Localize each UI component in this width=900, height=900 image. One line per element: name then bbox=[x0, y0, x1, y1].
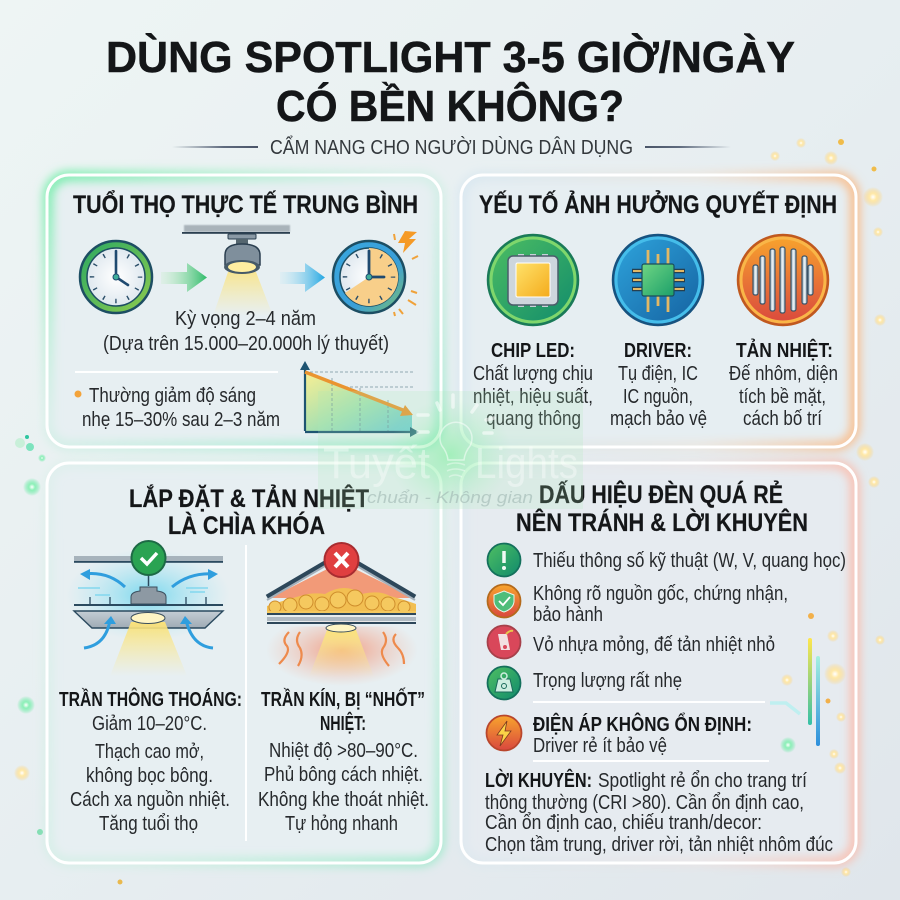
icon: missing specs bbox=[488, 544, 520, 576]
text: ventilated ceiling: TRẦN THÔNG THOÁNG: bbox=[59, 687, 242, 711]
warning 2 bbox=[533, 583, 788, 626]
panel: warning signs and advice bbox=[461, 463, 856, 863]
title: CÓ BỀN KHÔNG? bbox=[276, 80, 624, 131]
text: driver: DRIVER: bbox=[624, 339, 692, 362]
text: heat sink: tích bề mặt, bbox=[739, 386, 826, 408]
watermark: Tuyết Lights: Lights bbox=[475, 439, 578, 488]
text: advice bbox=[485, 768, 833, 856]
divider bbox=[533, 760, 769, 762]
divider bbox=[533, 701, 765, 703]
arrow: green bbox=[161, 263, 207, 292]
icon: thin plastic bbox=[488, 626, 520, 658]
heading bbox=[516, 479, 808, 537]
text: sealed ceiling: Không khe thoát nhiệt. bbox=[258, 789, 429, 811]
subtitle: CẨM NANG CHO NGƯỜI DÙNG DÂN DỤNG bbox=[270, 136, 633, 159]
text: advice: Cần ổn định cao, chiếu tranh/decor: bbox=[485, 812, 762, 834]
text: chip LED: nhiệt, hiệu suất, bbox=[473, 386, 593, 408]
icon: voltage bolt bbox=[486, 716, 522, 750]
text: brightness loss: Thường giảm độ sáng bbox=[89, 385, 256, 407]
icon: LED chip bbox=[488, 235, 578, 325]
panel: average lifespan bbox=[47, 175, 441, 447]
watermark: Tuyết Lights: Tuyết bbox=[323, 439, 430, 488]
text: ventilated ceiling: không bọc bông. bbox=[86, 765, 213, 787]
icon: weight bbox=[488, 666, 520, 700]
icon: depleted clock with spark bbox=[333, 231, 418, 316]
arrow: blue bbox=[280, 263, 325, 292]
heading: LÀ CHÌA KHÓA bbox=[168, 510, 325, 540]
divider bbox=[245, 545, 247, 841]
icon: spotlight bbox=[182, 225, 290, 316]
text: sealed ceiling: TRẦN KÍN, BỊ “NHỐT” bbox=[261, 687, 425, 711]
text: expectation bbox=[103, 308, 389, 355]
text: sealed ceiling: NHIỆT: bbox=[320, 711, 366, 735]
text: ventilated ceiling: Cách xa nguồn nhiệt. bbox=[70, 789, 230, 811]
title bbox=[106, 32, 795, 131]
icon: shield bbox=[488, 584, 520, 618]
text: brightness loss bbox=[74, 385, 280, 431]
text: brightness loss: nhẹ 15–30% sau 2–3 năm bbox=[82, 409, 280, 431]
text: chip LED bbox=[473, 339, 593, 430]
text: driver: Tụ điện, IC bbox=[618, 363, 698, 385]
warning 5: Driver rẻ ít bảo vệ bbox=[533, 735, 667, 757]
text: expectation: Kỳ vọng 2–4 năm bbox=[175, 308, 316, 330]
text: driver: IC nguồn, bbox=[623, 386, 693, 408]
heading: TUỔI THỌ THỰC TẾ TRUNG BÌNH bbox=[73, 189, 418, 219]
warning 2: bảo hành bbox=[533, 604, 603, 626]
icon: heat sink bbox=[738, 235, 828, 325]
text: ventilated ceiling bbox=[59, 687, 242, 835]
panel: decisive factors bbox=[461, 175, 856, 447]
icon: driver IC bbox=[613, 235, 703, 325]
warning 2: Không rõ nguồn gốc, chứng nhận, bbox=[533, 583, 788, 605]
line chart bbox=[300, 361, 419, 437]
panel: installation and cooling bbox=[47, 463, 441, 863]
text: heat sink: Đế nhôm, diện bbox=[729, 363, 838, 385]
text: advice: Chọn tầm trung, driver rời, tản nhiệt nhôm đúc bbox=[485, 834, 833, 856]
heading: NÊN TRÁNH & LỜI KHUYÊN bbox=[516, 507, 808, 537]
warning 5 bbox=[533, 712, 752, 757]
text: sealed ceiling bbox=[258, 687, 429, 835]
illustration: ventilated ceiling bbox=[66, 541, 230, 676]
text: ventilated ceiling: Thạch cao mở, bbox=[95, 741, 204, 763]
watermark: Tuyết Lights bbox=[318, 391, 583, 511]
text: chip LED: quang thông bbox=[486, 408, 581, 430]
text: advice: Spotlight rẻ ổn cho trang trí bbox=[598, 770, 807, 792]
text: heat sink bbox=[729, 338, 838, 430]
divider bbox=[75, 371, 278, 373]
illustration: sealed ceiling bbox=[266, 543, 418, 686]
text: advice: thông thường (CRI >80). Cần ổn định cao, bbox=[485, 792, 804, 814]
text: chip LED: CHIP LED: bbox=[491, 339, 575, 362]
warning 1: Thiếu thông số kỹ thuật (W, V, quang học) bbox=[533, 550, 846, 572]
warning 5: ĐIỆN ÁP KHÔNG ỔN ĐỊNH: bbox=[533, 712, 752, 736]
text: driver: mạch bảo vệ bbox=[610, 408, 707, 430]
text: chip LED: Chất lượng chịu bbox=[473, 363, 593, 385]
warning 4: Trọng lượng rất nhẹ bbox=[533, 670, 682, 692]
text: heat sink: TẢN NHIỆT: bbox=[736, 338, 833, 362]
text: heat sink: cách bố trí bbox=[743, 408, 822, 430]
text: sealed ceiling: Tự hỏng nhanh bbox=[285, 813, 398, 835]
decorative light strips bbox=[770, 613, 846, 774]
icon: full clock bbox=[80, 241, 152, 313]
watermark: Tuyết Lights: chuẩn - Không gian bbox=[367, 488, 533, 507]
warning 3: Vỏ nhựa mỏng, đế tản nhiệt nhỏ bbox=[533, 634, 775, 656]
heading bbox=[129, 483, 369, 540]
heading: YẾU TỐ ẢNH HƯỞNG QUYẾT ĐỊNH bbox=[479, 189, 837, 219]
title: DÙNG SPOTLIGHT 3-5 GIỜ/NGÀY bbox=[106, 32, 795, 82]
text: sealed ceiling: Nhiệt độ >80–90°C. bbox=[269, 740, 418, 762]
heading: LẮP ĐẶT & TẢN NHIỆT bbox=[129, 483, 369, 513]
text: advice: LỜI KHUYÊN: bbox=[485, 768, 592, 792]
text: driver bbox=[610, 339, 707, 430]
text: ventilated ceiling: Tăng tuổi thọ bbox=[99, 813, 198, 835]
heading: DẤU HIỆU ĐÈN QUÁ RẺ bbox=[539, 479, 783, 509]
text: ventilated ceiling: Giảm 10–20°C. bbox=[92, 713, 207, 735]
text: sealed ceiling: Phủ bông cách nhiệt. bbox=[264, 764, 423, 786]
text: expectation: (Dựa trên 15.000–20.000h lý thuyết) bbox=[103, 333, 389, 355]
